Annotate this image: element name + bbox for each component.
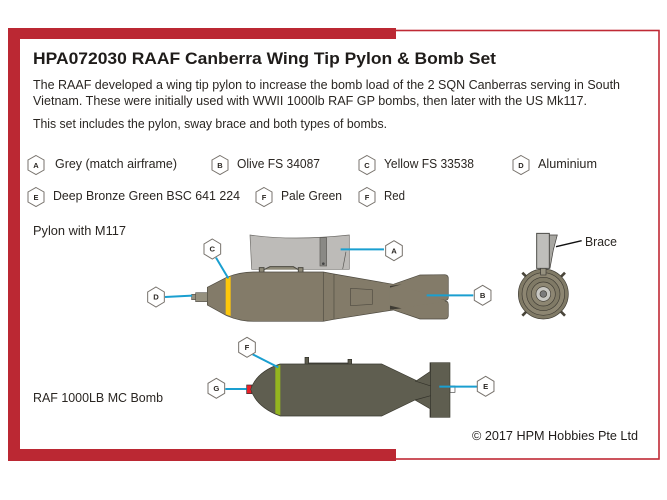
callout G: G bbox=[213, 384, 219, 393]
legend item F pale green: Pale Green bbox=[281, 189, 342, 203]
legend item F pale green: F bbox=[262, 193, 267, 202]
intro text: Vietnam. These were initially used with WWII 1000lb RAF GP bombs, then later with the US Mk117. bbox=[33, 94, 587, 108]
nose fuze bbox=[192, 293, 207, 302]
set contents text: This set includes the pylon, sway brace and both types of bombs. bbox=[33, 117, 387, 131]
callout B: B bbox=[480, 291, 486, 300]
diagram: RAF 1000LB MC bomb bbox=[208, 337, 494, 417]
legend item E: Deep Bronze Green BSC 641 224 bbox=[53, 189, 240, 203]
label: pylon with M117: Pylon with M117 bbox=[33, 224, 126, 238]
bomb end rings bbox=[518, 269, 568, 319]
callout F bbox=[239, 337, 278, 367]
legend item A: Grey (match airframe) bbox=[55, 157, 177, 171]
lugs bbox=[305, 357, 352, 371]
legend item B bbox=[212, 156, 320, 174]
legend item A bbox=[28, 156, 177, 174]
fin notches bbox=[390, 284, 402, 310]
callout C bbox=[204, 239, 228, 278]
brace clip bbox=[548, 235, 557, 268]
legend item C bbox=[359, 156, 474, 174]
legend item F red: Red bbox=[384, 189, 405, 203]
title: HPA072030 RAAF Canberra Wing Tip Pylon & Bomb Set bbox=[33, 49, 496, 68]
colour legend bbox=[28, 156, 597, 206]
legend item C: Yellow FS 33538 bbox=[384, 157, 474, 171]
bomb body bbox=[207, 272, 448, 321]
diagram: pylon with M117 bomb bbox=[148, 235, 491, 321]
tail stub bbox=[450, 386, 455, 392]
callout D: D bbox=[153, 293, 159, 302]
label: brace: Brace bbox=[585, 235, 617, 249]
legend item B: B bbox=[217, 161, 223, 170]
legend item A: A bbox=[33, 161, 39, 170]
callout E: E bbox=[483, 382, 488, 391]
legend item E bbox=[28, 188, 240, 206]
pylon lugs bbox=[259, 267, 303, 273]
callout A: A bbox=[391, 246, 397, 255]
legend item D: Aluminium bbox=[538, 157, 597, 171]
callout C: C bbox=[210, 245, 216, 254]
legend item D: D bbox=[518, 161, 524, 170]
yellow band bbox=[226, 276, 231, 316]
callout D bbox=[148, 287, 192, 307]
callout A bbox=[341, 241, 402, 261]
pylon end bbox=[537, 233, 549, 268]
brace leader bbox=[556, 241, 582, 247]
intro text: The RAAF developed a wing tip pylon to increase the bomb load of the 2 SQN Canberras serving in South bbox=[33, 78, 620, 92]
legend item F red bbox=[359, 188, 405, 206]
copyright: © 2017 HPM Hobbies Pte Ltd bbox=[472, 428, 638, 443]
intro text bbox=[33, 78, 620, 108]
label: RAF 1000LB MC bomb: RAF 1000LB MC Bomb bbox=[33, 391, 163, 405]
callout G bbox=[208, 378, 247, 398]
legend item B: Olive FS 34087 bbox=[237, 157, 320, 171]
callout F: F bbox=[245, 343, 250, 352]
legend item F red: F bbox=[365, 193, 370, 202]
nose tip bbox=[247, 385, 252, 394]
callout E bbox=[439, 376, 494, 396]
bomb body bbox=[251, 363, 450, 417]
tail fins bbox=[522, 273, 565, 316]
legend item E: E bbox=[33, 193, 39, 202]
legend item C: C bbox=[364, 161, 370, 170]
diagram: bomb end view with brace bbox=[518, 233, 582, 319]
pylon bbox=[250, 235, 349, 269]
fin lines bbox=[415, 363, 431, 417]
body seams and window bbox=[323, 272, 372, 321]
pale green band bbox=[275, 365, 280, 415]
callout B bbox=[427, 285, 491, 305]
tail centre fill bbox=[390, 284, 445, 310]
legend item D bbox=[513, 156, 597, 174]
legend item F pale green bbox=[256, 188, 342, 206]
